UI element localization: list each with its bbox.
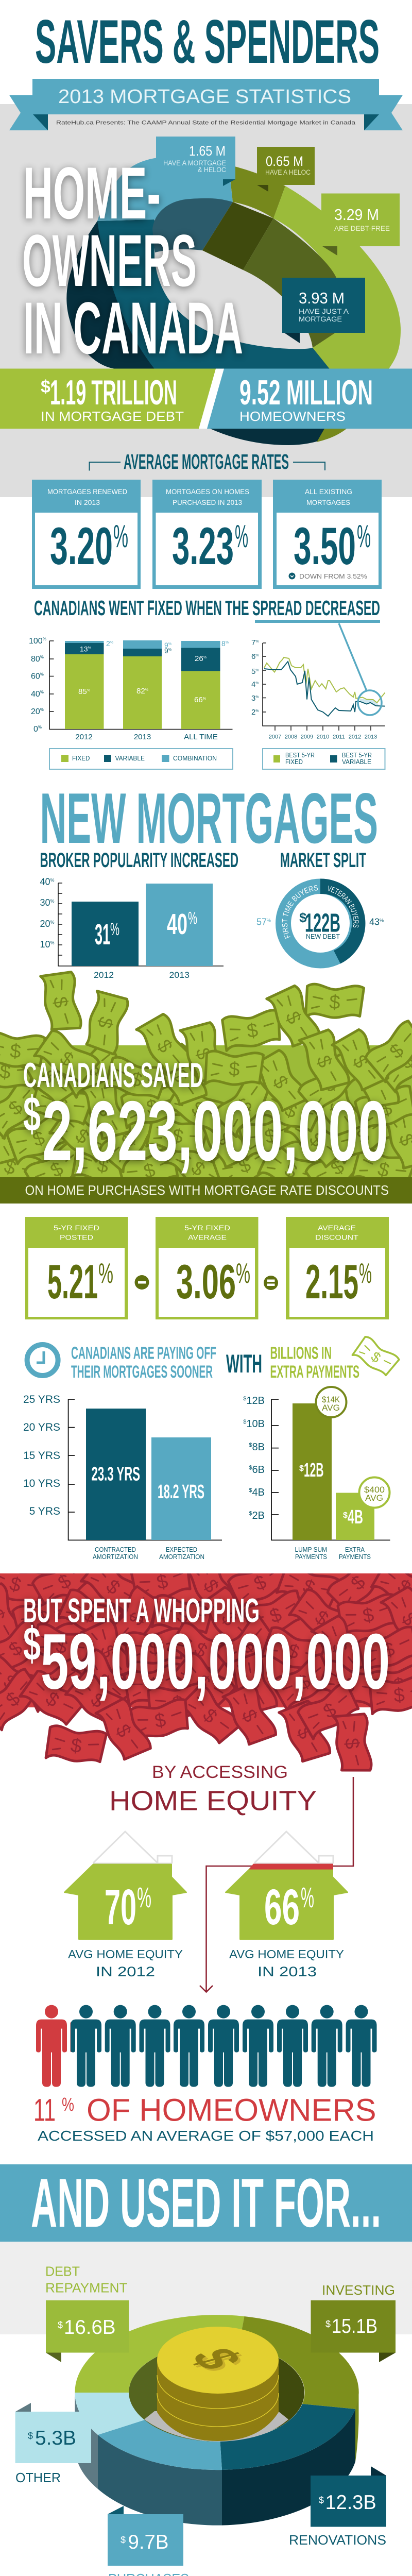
page background: grey hero area [0,104,412,497]
bar 2013: % [145,688,148,692]
bar: lump sum: PAYMENTS [295,1553,327,1561]
heading: paying off sooner [71,1344,216,1382]
callout: investing: $ [325,2319,331,2329]
icon: equals [264,1276,278,1290]
bar: lump sum: 12B [304,1460,323,1481]
bar all time: % [203,697,206,701]
heading: extra payments: BILLIONS IN [270,1344,332,1363]
bar chart: extra payments: 4B [252,1487,265,1498]
stat: homeowners: HOMEOWNERS [239,409,346,424]
stat: mortgage debt [41,373,184,424]
legend: best rates: VARIABLE [342,758,371,766]
bar chart: amortization: 10 YRS [23,1478,60,1489]
line chart: fixed vs variable rates: % [255,682,259,685]
stacked bar chart: fixed vs variable: % [40,672,44,677]
bar: contracted [86,1409,146,1561]
line chart: fixed vs variable rates: 2012 [349,734,361,740]
hero ring chart [66,158,401,445]
bar 2013: % [188,909,197,928]
stacked bar chart: fixed vs variable [29,637,233,741]
rate card: all existing: MORTGAGES [306,498,350,506]
icon: dollar bill [352,1335,400,1379]
money pile: red bills [0,1573,412,1772]
bar 2013: 2013 [134,733,151,741]
icon: clock [27,1345,58,1376]
house: equity 2013: AVG HOME EQUITY [229,1947,344,1961]
house: equity 2013 [226,1832,348,1979]
background: light grey panel [0,2242,412,2334]
line chart: fixed vs variable rates: % [255,709,259,713]
bar: expected: EXPECTED [166,1546,197,1553]
bar 2012: 13 [80,645,88,653]
bar chart: extra payments: 10B [246,1418,265,1430]
line chart: fixed vs variable rates: 2 [251,708,255,717]
donut chart: market split: 57 [256,917,267,927]
donut chart: market split: 122B [305,908,340,938]
hero heading [22,152,243,369]
line chart: fixed vs variable rates: % [255,640,259,643]
money pile: green bills [0,972,412,1199]
bar chart: amortization: 5 YRS [29,1505,60,1517]
bar all time: 8 [221,639,226,648]
donut chart: market split [256,879,384,969]
bar chart: extra payments: $ [249,1511,252,1517]
callout: debt repayment: $ [58,2320,63,2330]
rate card: 5-yr average: 3.06 [176,1255,236,1309]
legend: mortgage types: COMBINATION [173,755,217,762]
callout: renovations: RENOVATIONS [289,2532,386,2548]
bar chart: broker popularity: % [50,920,55,925]
heading: average mortgage rates [90,450,325,473]
callout: 1.65 M: 1.65 M [189,143,226,159]
line chart: fixed vs variable rates: 2007 [269,734,281,740]
stacked bar chart: fixed vs variable: 20 [31,707,40,716]
rate card: average discount: % [359,1257,372,1289]
stacked bar chart: fixed vs variable: 60 [31,672,40,681]
stacked bar chart: fixed vs variable: 40 [31,690,40,699]
bar all time: 66 [194,696,203,704]
donut chart: market split: NEW DEBT [306,933,340,940]
bar all time: 26 [195,654,203,663]
legend: best rates: FIXED [285,758,303,766]
banner: rate discounts [0,1177,412,1204]
icon: minus [135,1275,149,1290]
legend: best rates [263,749,385,769]
coin stack: $ [178,2343,255,2375]
bar 2013 [123,640,171,741]
heading: by accessing home equity [109,1762,317,1817]
line chart: fixed vs variable rates: 5 [251,667,255,676]
headline: canadians saved: $ [23,1087,41,1142]
line chart: fixed vs variable rates [251,638,385,740]
rate card: average discount: DISCOUNT [315,1233,358,1242]
donut chart: market split: VETERAN BUYERS [329,885,358,927]
stacked bar chart: fixed vs variable: 100 [29,637,43,646]
callout: investing: 15.1B [332,2315,377,2337]
legend: best rates: BEST 5-YR [342,752,372,759]
donut chart: market split: FIRST TIME BUYERS [282,885,318,939]
bar: contracted: AMORTIZATION [93,1553,138,1561]
rate card: renewed: IN 2013 [75,498,100,506]
bar chart: extra payments: $ [243,1396,246,1402]
coin stack [157,2327,279,2441]
bar 2012: 31 [95,918,110,951]
rate card: 5-yr average [156,1217,259,1319]
stat: mortgage debt: $ [41,377,50,397]
banner: total debt and homeowners [0,369,412,429]
bar 2013 [146,884,213,980]
callout: debt repayment: DEBT [45,2264,80,2279]
line chart: fixed vs variable rates: % [255,669,259,672]
rate card: purchased: MORTGAGES ON HOMES [166,487,249,496]
bar: extra: 4B [348,1506,363,1528]
rate card: purchased: 3.23 [172,517,234,575]
bar: extra: EXTRA [345,1546,365,1553]
rate card: all existing: 3.50 [294,517,356,575]
3D ring chart with coins [75,2315,359,2526]
stacked bar chart: fixed vs variable: % [40,690,44,694]
rate card: renewed [32,480,141,589]
bar: lump sum: $14K [322,1395,340,1404]
bar chart: broker popularity: 40 [40,877,50,887]
rate card: 5-yr posted: 5.21 [47,1255,98,1309]
callout: 3.29 M: ARE DEBT-FREE [334,224,390,232]
legend: mortgage types [49,749,233,769]
rate card: average discount: AVERAGE [318,1224,356,1232]
callout: renovations: $ [319,2495,324,2505]
stacked bar chart: fixed vs variable: % [38,725,42,730]
callout: 1.65 M: HAVE A MORTGAGE [163,159,226,167]
bar 2012 [65,639,113,741]
bar: expected [151,1437,211,1561]
bar 2012: % [110,920,119,939]
line chart: fixed vs variable rates: 2013 [365,734,377,740]
bar: expected: AMORTIZATION [159,1553,204,1561]
heading: broker popularity: BROKER POPULARITY INCREASED [40,849,238,872]
rate card: purchased: % [235,519,248,554]
bar 2012 [72,902,139,980]
headline: but spent a whopping: $ [23,1618,41,1670]
stat: mortgage debt: IN MORTGAGE DEBT [41,409,184,424]
line chart: fixed vs variable rates: 6 [251,652,255,661]
bar: lump sum: $ [299,1464,304,1473]
hero heading: OWNERS [22,220,197,302]
bar chart: amortization [23,1394,222,1561]
callout: other: $ [28,2431,33,2441]
rate card: purchased: PURCHASED IN 2013 [173,498,242,506]
rate card: 5-yr posted: POSTED [60,1233,93,1242]
rate card: renewed: MORTGAGES RENEWED [47,487,127,496]
bar: extra: PAYMENTS [339,1553,371,1561]
rate card: 5-yr posted: 5-YR FIXED [54,1224,99,1232]
bar 2013: 9 [164,641,168,649]
stacked bar chart: fixed vs variable: % [43,637,46,641]
line chart: fixed vs variable rates: 4 [251,680,255,689]
house: equity 2012 [64,1832,186,1979]
house: equity 2013: IN 2013 [258,1964,317,1979]
line chart: fixed vs variable rates: 2008 [285,734,297,740]
donut chart: market split: 43 [369,917,380,927]
callout: 3.93 M: 3.93 M [299,289,345,307]
house: equity 2012: 70 [105,1879,136,1935]
bar chart: broker popularity: 30 [40,897,50,908]
donut chart: market split: % [267,918,271,923]
callout: 3.29 M: 3.29 M [334,206,379,224]
bar: lump sum [293,1387,346,1561]
bar 2012: % [110,641,113,645]
rate card: 5-yr posted [25,1217,128,1319]
rate card: average discount: 2.15 [305,1255,358,1309]
banner: rate discounts: ON HOME PURCHASES WITH MORTGAGE RATE DISCOUNTS [25,1182,389,1198]
legend: mortgage types: VARIABLE [115,755,145,762]
bar chart: amortization: 15 YRS [23,1450,60,1462]
callout: purchases [108,2506,189,2576]
bar: extra: AVG [365,1493,383,1503]
rate card: 5-yr posted: % [98,1257,113,1289]
stacked bar chart: fixed vs variable: % [40,707,44,712]
rate card: 5-yr average: % [236,1257,250,1289]
bar chart: extra payments: $ [249,1442,252,1448]
line chart: fixed vs variable rates: % [255,654,259,657]
callout: 3.93 M: HAVE JUST A [299,307,349,315]
callout: debt repayment: 16.6B [64,2316,115,2338]
bar chart: extra payments: 12B [246,1395,265,1406]
rate card: purchased [152,480,262,589]
bar chart: extra payments: $ [249,1465,252,1471]
bar chart: extra payments: 2B [252,1510,265,1521]
callout: other: 5.3B [35,2427,76,2449]
bar chart: amortization: 20 YRS [23,1421,60,1433]
callout: 3.93 M: MORTGAGE [299,315,342,323]
ribbon heading: 2013 MORTGAGE STATISTICS [58,86,351,108]
bar: contracted: 23.3 YRS [92,1463,140,1485]
ribbon subtitle: RateHub.ca Presents: The CAAMP Annual State of the Residential Mortgage Market in Canada [56,120,356,126]
bar 2013: 82 [136,687,145,696]
bar: extra [336,1478,389,1561]
bar: extra: $ [343,1511,348,1520]
bar 2013: % [168,642,171,646]
bar: expected: 18.2 YRS [158,1481,204,1503]
rate card: all existing: DOWN FROM 3.52% [299,572,367,580]
bar: contracted: CONTRACTED [95,1546,136,1553]
bar chart: amortization: 25 YRS [23,1394,60,1405]
bar all time: % [226,641,229,645]
callout: purchases: $ [121,2535,126,2545]
rate card: 5-yr average: 5-YR FIXED [184,1224,230,1232]
callout: 1.65 M [156,137,235,186]
house: equity 2012: % [137,1881,151,1913]
callout: purchases: 9.7B [128,2531,169,2553]
line chart: fixed vs variable rates: 7 [251,638,255,647]
bar chart: extra payments: 6B [252,1464,265,1476]
bar 2012: % [88,646,91,650]
callout: debt repayment: REPAYMENT [45,2280,128,2295]
rate card: all existing: % [357,519,371,554]
headline: canadians saved: CANADIANS SAVED [23,1056,203,1095]
stacked bar chart: fixed vs variable: % [40,655,44,659]
line chart: fixed vs variable rates: 2009 [301,734,313,740]
callout: investing: INVESTING [322,2282,395,2298]
line chart: fixed vs variable rates: 3 [251,694,255,703]
bar chart: broker popularity: % [50,899,55,904]
bar 2012: 2 [106,639,110,648]
bar: extra: $400 [364,1485,385,1495]
bar chart: broker popularity [40,877,224,980]
bar: lump sum: AVG [322,1403,340,1413]
stacked bar chart: fixed vs variable: 80 [31,655,40,664]
house: equity 2012: AVG HOME EQUITY [68,1947,183,1961]
house: equity 2013: % [301,1881,314,1913]
rate card: all existing [273,480,382,589]
bar chart: extra payments: $ [243,1419,246,1425]
bar chart: broker popularity: % [50,878,55,883]
heading: by accessing home equity: BY ACCESSING [152,1762,288,1782]
house: equity 2013: 66 [264,1879,300,1935]
callout: other: OTHER [15,2470,61,2485]
bar all time: ALL TIME [184,733,218,741]
callout: renovations: 12.3B [325,2492,376,2514]
callout: 0.65 M: 0.65 M [266,154,303,169]
heading: with: WITH [226,1349,262,1378]
rate card: average discount [286,1217,389,1319]
bar 2013: 9 [164,647,168,655]
bar chart: broker popularity: 20 [40,919,50,929]
coin stack: $ [180,2345,258,2377]
bar all time: % [203,656,207,659]
bar chart: broker popularity: 10 [40,939,50,950]
bar: lump sum: LUMP SUM [295,1546,327,1553]
headline: canadians saved [23,1056,388,1178]
stat: 11% of homeowners: ACCESSED AN AVERAGE OF $57,000 EACH [38,2128,374,2144]
bar 2012: % [87,689,90,692]
heading: paying off sooner: THEIR MORTGAGES SOONER [71,1362,213,1382]
callout: 0.65 M: HAVE A HELOC [265,168,311,176]
bar 2013: % [168,648,171,652]
bar chart: extra payments [243,1387,390,1561]
callout: investing [311,2282,396,2362]
legend: best rates: BEST 5-YR [285,752,315,759]
callout: 1.65 M: & HELOC [198,166,226,174]
callout: renovations [289,2466,386,2548]
bar chart: extra payments: $ [249,1487,252,1494]
callout: 3.93 M [282,278,365,343]
bar 2012: 2012 [75,733,93,741]
stacked bar chart: fixed vs variable: 0 [33,725,38,734]
rate card: all existing: ALL EXISTING [305,487,352,496]
legend: mortgage types: FIXED [72,755,90,762]
rate card: 5-yr average: AVERAGE [188,1233,227,1242]
callout: 0.65 M [257,147,315,192]
callout: debt repayment [45,2264,129,2362]
heading: extra payments [270,1344,359,1382]
pictogram: ten people [36,2005,377,2087]
bar 2012: 85 [78,687,87,696]
bar all time [181,639,229,741]
hero heading: HOME- [23,152,161,234]
stat: 11% of homeowners: % [62,2094,74,2115]
heading: by accessing home equity: HOME EQUITY [109,1786,317,1817]
rate card: renewed: % [113,519,128,554]
line chart: fixed vs variable rates: 2010 [317,734,329,740]
ribbon banner [9,79,403,130]
bar chart: extra payments: 8B [252,1442,265,1453]
bar 2013: 40 [167,908,187,941]
line chart: fixed vs variable rates: % [255,696,259,699]
callout: 3.29 M [321,194,400,256]
stat: 11% of homeowners: 11 [33,2093,56,2128]
heading: paying off sooner: CANADIANS ARE PAYING OFF [71,1344,216,1363]
bar 2012: 2012 [94,970,114,980]
connector from spread to chart [339,623,367,691]
line chart: fixed vs variable rates: 2011 [333,734,345,740]
donut chart: market split: % [380,918,384,923]
callout: other [15,2403,91,2485]
stat: homeowners [239,373,373,424]
bar 2013: 2013 [169,970,190,980]
stat: mortgage debt: 1.19 TRILLION [50,373,177,412]
house: equity 2012: IN 2012 [96,1964,155,1979]
donut chart: market split: $ [299,910,307,925]
arrow: from bills to homeowners [200,1777,353,1992]
rate card: renewed: 3.20 [50,517,113,575]
stat: 11% of homeowners: OF HOMEOWNERS [87,2093,376,2128]
bar chart: broker popularity: % [50,940,55,945]
stat: 11% of homeowners [33,2093,376,2144]
